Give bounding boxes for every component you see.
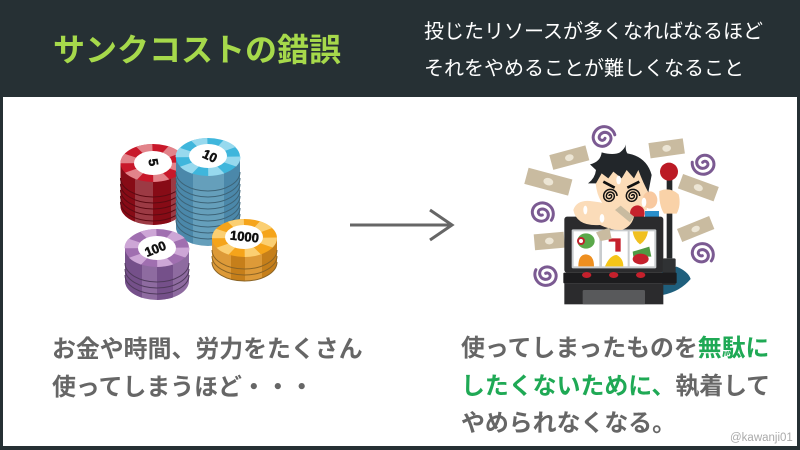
sweat drops <box>616 176 646 207</box>
orange chip stack <box>212 219 278 282</box>
ear <box>643 191 657 209</box>
arm and money <box>573 201 634 241</box>
lever <box>667 178 672 258</box>
left caption <box>52 336 363 401</box>
subtitle: それをやめることが難しくなること <box>424 57 744 80</box>
blue shirt <box>645 211 659 221</box>
icon: casino chips <box>120 138 277 310</box>
slot machine <box>563 163 678 304</box>
reel window <box>572 229 656 268</box>
gripping hand <box>659 189 680 214</box>
purple chip stack <box>124 229 190 300</box>
head <box>595 169 648 213</box>
left caption: お金や時間、労力をたくさん <box>52 336 363 363</box>
dizzy eyes <box>604 189 640 201</box>
title: サンクコストの錯誤 <box>53 32 341 68</box>
hair <box>588 144 652 192</box>
button bar <box>563 273 677 283</box>
blue chip stack: 10 <box>200 146 220 166</box>
right caption: 使ってしまったものを無駄に <box>461 335 769 362</box>
arrow <box>350 210 452 240</box>
dizzy spirals <box>530 124 718 289</box>
red chip stack: 5 <box>145 157 161 167</box>
red chip stack <box>120 144 178 225</box>
right caption: したくないために、執着して <box>461 373 770 400</box>
blue chip stack <box>176 138 240 250</box>
eyebrows <box>603 182 639 188</box>
cabinet base <box>564 283 663 304</box>
subtitle: 投じたリソースが多くなればなるほど <box>424 20 763 43</box>
icon: man at slot machine <box>524 124 719 304</box>
left caption: 使ってしまうほど・・・ <box>52 374 314 401</box>
purple chip stack: 100 <box>142 238 168 260</box>
white content panel <box>3 97 797 446</box>
credit: @kawanji01 <box>730 432 793 444</box>
orange chip stack: 1000 <box>229 228 260 245</box>
blue trousers <box>662 267 691 295</box>
right caption: やめられなくなる。 <box>461 410 676 437</box>
subtitle <box>424 20 763 80</box>
right caption <box>461 335 770 437</box>
banknotes <box>524 138 719 250</box>
mouth <box>630 205 645 221</box>
reel fruit <box>577 231 651 266</box>
